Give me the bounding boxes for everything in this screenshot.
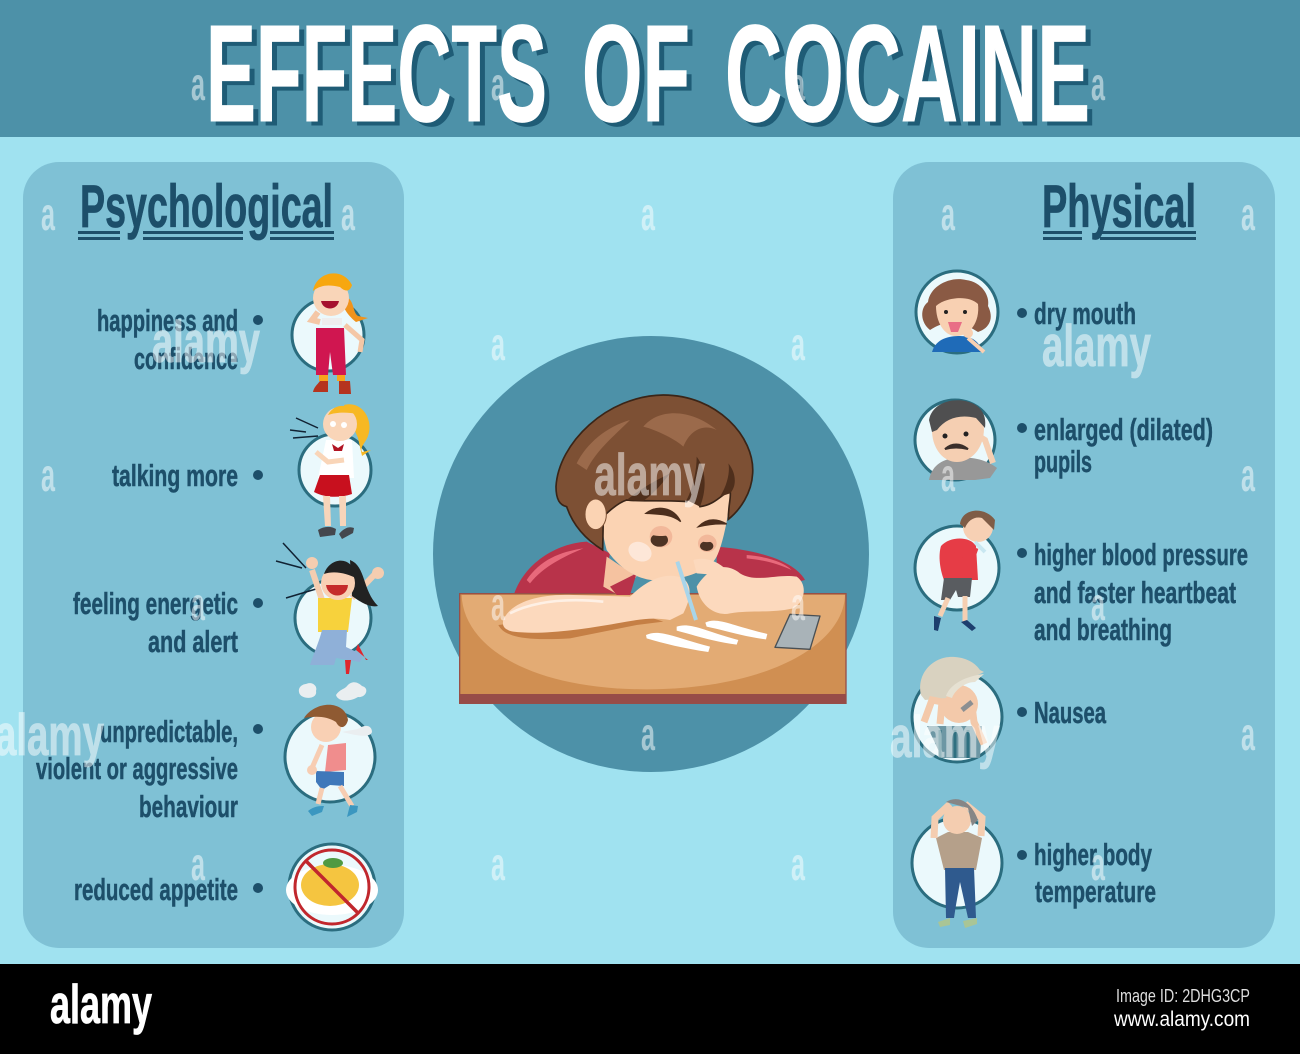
icon: boy holding chest: [915, 511, 999, 631]
title banner: EFFECTS: [206, 0, 547, 151]
item: happiness and confidence: happiness and: [97, 303, 238, 338]
item: nausea: Nausea: [1034, 695, 1106, 730]
item: nausea: [1017, 695, 1106, 730]
item: higher body temperature: higher body: [1034, 837, 1153, 872]
watermarks: a: [1091, 58, 1105, 110]
footer bar: [0, 964, 1300, 1054]
item: reduced appetite: reduced appetite: [74, 872, 238, 907]
icon: man with dilated pupils: [915, 400, 997, 480]
item: happiness and confidence: [97, 303, 263, 376]
icon: old man in cap with nausea: [912, 657, 1002, 762]
title banner: EFFECTS: [211, 1, 552, 155]
watermarks: [0, 58, 1255, 890]
watermarks: a: [191, 578, 205, 630]
icon: laughing girl in overalls: [292, 273, 368, 394]
panel: physical: [893, 162, 1275, 948]
central illustration: boy snorting at table: [433, 336, 869, 772]
watermarks: alamy: [1042, 314, 1151, 379]
arms and hands: [498, 559, 804, 639]
heading: physical: [1042, 173, 1196, 240]
watermarks: alamy: [152, 310, 260, 375]
watermarks: a: [791, 58, 805, 110]
watermarks: a: [1241, 708, 1255, 760]
heading: physical: Physical: [1042, 173, 1196, 240]
watermarks: a: [341, 188, 355, 240]
watermarks: a: [41, 449, 55, 501]
watermarks: alamy: [890, 705, 1000, 770]
icon: man holding head, feeling hot: [912, 799, 1002, 928]
item: enlarged (dilated) pupils: pupils: [1034, 444, 1092, 479]
item: happiness and confidence: confidence: [134, 341, 238, 376]
item: enlarged (dilated) pupils: [1017, 412, 1213, 479]
item: higher body temperature: temperature: [1035, 874, 1156, 909]
watermarks: a: [1241, 188, 1255, 240]
watermarks: a: [1241, 449, 1255, 501]
title banner: OF: [587, 1, 695, 155]
icon: woman with dry mouth: [916, 271, 998, 353]
watermarks: a: [641, 708, 655, 760]
item: unpredictable, violent or aggressive behaviour: violent or aggressive: [36, 751, 238, 786]
item: dry mouth: [1017, 296, 1136, 331]
icon: angry boy with steam clouds: [285, 682, 375, 817]
item: higher body temperature: [1017, 837, 1156, 909]
watermarks: a: [491, 318, 505, 370]
title banner: OF: [582, 0, 690, 151]
watermarks: a: [791, 838, 805, 890]
item: feeling energetic and alert: feeling energetic: [73, 586, 238, 621]
heading: psychological: Psychological: [80, 173, 333, 240]
item: dry mouth: dry mouth: [1034, 296, 1136, 331]
item: unpredictable, violent or aggressive behaviour: [36, 714, 263, 824]
watermarks: a: [1091, 578, 1105, 630]
watermarks: a: [41, 188, 55, 240]
watermarks: a: [941, 188, 955, 240]
footer bar: alamy: [50, 973, 152, 1035]
icon: talking girl in red skirt: [290, 404, 371, 539]
heading: psychological: [78, 173, 334, 240]
watermarks: a: [491, 58, 505, 110]
watermarks: a: [1091, 838, 1105, 890]
watermarks: a: [941, 449, 955, 501]
watermarks: alamy: [594, 443, 705, 508]
watermarks: a: [641, 188, 655, 240]
title banner: [0, 0, 1300, 155]
watermarks: a: [791, 578, 805, 630]
item: unpredictable, violent or aggressive behaviour: behaviour: [139, 789, 238, 824]
item: unpredictable, violent or aggressive behaviour: unpredictable,: [100, 714, 238, 749]
watermarks: a: [491, 578, 505, 630]
item: talking more: talking more: [112, 458, 238, 493]
item: enlarged (dilated) pupils: enlarged (dilated): [1034, 412, 1213, 447]
icon: jumping excited girl: [276, 543, 384, 674]
panel: psychological: [23, 162, 404, 948]
watermarks: a: [191, 58, 205, 110]
table: [459, 594, 846, 703]
item: higher blood pressure and faster heartbeat and breathing: and breathing: [1034, 612, 1172, 647]
footer bar: Image ID: 2DHG3CP: [1116, 986, 1250, 1006]
watermarks: a: [791, 318, 805, 370]
item: higher blood pressure and faster heartbeat and breathing: [1017, 537, 1248, 647]
item: feeling energetic and alert: [73, 586, 263, 659]
shirt: [513, 542, 805, 597]
watermarks: a: [491, 838, 505, 890]
watermarks: a: [191, 838, 205, 890]
phone: [775, 614, 820, 649]
footer bar: www.alamy.com: [1113, 1008, 1250, 1031]
head: [556, 395, 753, 595]
cocaine lines: [646, 621, 767, 652]
item: feeling energetic and alert: and alert: [148, 624, 238, 659]
icon: crossed out plate of food: [286, 844, 378, 930]
